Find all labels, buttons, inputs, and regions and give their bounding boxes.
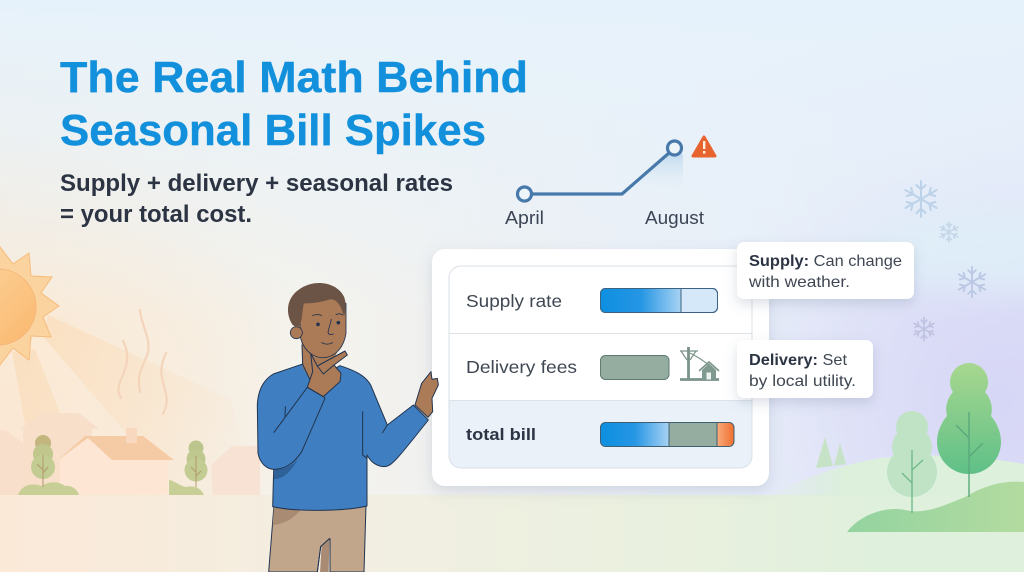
row: supply rate: Supply rate <box>466 291 562 311</box>
callout: supply <box>737 242 914 299</box>
icon: sun <box>0 247 59 365</box>
callout: delivery: Delivery: Set <box>749 352 848 369</box>
trousers <box>269 505 366 572</box>
subtitle: Supply + delivery + seasonal rates <box>60 170 453 197</box>
callout: delivery: by local utility. <box>749 373 856 390</box>
person <box>257 283 438 572</box>
title <box>60 53 528 155</box>
subtitle <box>60 170 453 228</box>
neck <box>302 342 340 380</box>
trees: left neighbourhood <box>18 435 208 495</box>
sweater <box>257 364 428 510</box>
row: supply rate <box>466 288 718 312</box>
row: total bill: total bill <box>466 425 536 444</box>
houses: left neighbourhood <box>0 413 260 495</box>
hand on chin <box>307 351 347 397</box>
icon: power line and house <box>680 347 719 380</box>
icon: warning triangle <box>693 137 715 156</box>
row: total bill <box>466 422 734 446</box>
total row background <box>449 400 752 468</box>
face <box>313 314 343 344</box>
trees: right landscape <box>887 363 1001 513</box>
line chart: April to August: August <box>645 208 704 228</box>
callout: supply: Supply: Can change <box>749 253 902 270</box>
title: The Real Math Behind <box>60 53 528 102</box>
far hand <box>415 372 438 417</box>
line chart: April to August <box>505 137 715 228</box>
callout: supply: with weather. <box>748 274 850 291</box>
heat waves <box>118 310 167 414</box>
title: Seasonal Bill Spikes <box>60 106 486 155</box>
icons: snowflakes <box>905 181 985 340</box>
head <box>299 295 346 358</box>
line chart: April to August: April <box>505 208 544 228</box>
callout: delivery <box>737 340 873 398</box>
row: delivery fees: Delivery fees <box>466 357 577 377</box>
sun rays <box>12 315 250 495</box>
panel: cost breakdown card <box>432 249 769 486</box>
hair <box>288 283 346 328</box>
hills: right landscape <box>760 437 1024 532</box>
subtitle: = your total cost. <box>60 201 252 228</box>
cuff <box>307 387 325 398</box>
row: delivery fees <box>466 347 719 380</box>
